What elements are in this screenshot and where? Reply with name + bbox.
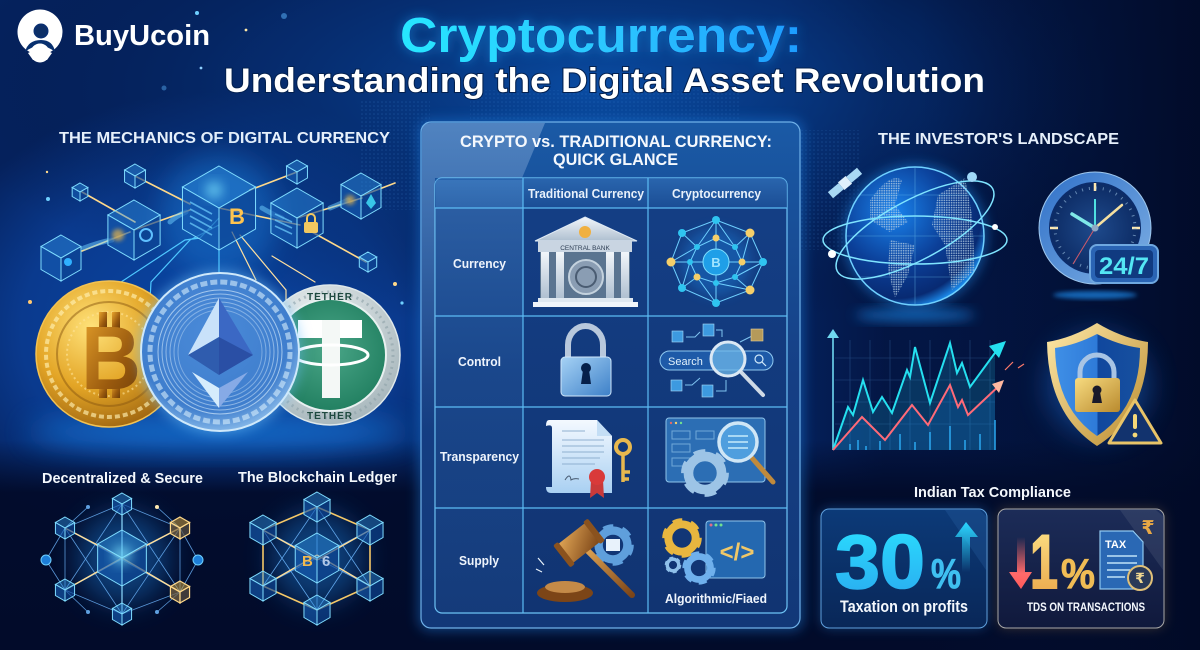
stat: 30 percent: 30 <box>835 520 925 605</box>
icon: tax document <box>1100 518 1155 590</box>
panel heading: QUICK GLANCE <box>553 150 678 169</box>
icon: logo mark <box>18 10 62 62</box>
icon: bitcoin coin <box>36 281 182 427</box>
icon: crypto network <box>666 216 767 307</box>
icon: central bank: CENTRAL BANK <box>560 245 610 252</box>
diagram: blockchain ledger <box>250 492 383 625</box>
chain of blocks illustration <box>41 155 395 300</box>
diagram: blockchain ledger: 6 <box>322 553 330 570</box>
icon: code window with magnifier <box>666 418 773 494</box>
stat: 1 percent <box>1030 520 1095 605</box>
cell text: algorithmic/fiaed: Algorithmic/Fiaed <box>665 591 767 606</box>
heading: indian tax compliance: Indian Tax Compliance <box>914 484 1071 501</box>
icon: search ledger: Search <box>668 356 703 368</box>
row label: supply: Supply <box>459 553 500 568</box>
title: Cryptocurrency: <box>400 9 802 63</box>
panel: crypto vs traditional currency <box>418 119 804 631</box>
icon: warning triangle <box>1109 400 1161 443</box>
heading: blockchain ledger: The Blockchain Ledger <box>238 469 397 486</box>
stat: 30 percent: % <box>931 550 961 597</box>
icon: shield with lock and warning <box>1046 323 1161 446</box>
arrow: up <box>955 522 978 572</box>
icon: gavel and gear <box>536 518 632 602</box>
icon: ethereum coin <box>138 270 302 434</box>
stat: 1 percent: % <box>1061 550 1095 597</box>
chart: volatile price lines <box>827 329 1024 450</box>
title: Cryptocurrency: <box>400 9 802 63</box>
logo wordmark: BuyUcoin <box>74 20 210 52</box>
panel heading <box>460 132 772 169</box>
stat: 1 percent: 1 <box>1030 520 1058 605</box>
icon: crypto network: B <box>711 255 721 270</box>
caption: taxation on profits: Taxation on profits <box>840 597 968 616</box>
card: 1% TDS <box>998 509 1164 628</box>
diagram: blockchain ledger: B <box>302 553 313 570</box>
row label: transparency: Transparency <box>440 449 520 464</box>
title <box>224 9 985 100</box>
icon: central bank <box>533 217 638 307</box>
icon: code and gears: </> <box>720 539 754 566</box>
column header: cryptocurrency: Cryptocurrency <box>672 186 762 201</box>
icon: tax document: ₹ <box>1135 570 1145 586</box>
heading: decentralized and secure: Decentralized & Secure <box>42 470 203 487</box>
panel heading: CRYPTO vs. TRADITIONAL CURRENCY: <box>460 132 772 151</box>
icon: tether coin: TETHER <box>307 292 353 303</box>
icon: document and key <box>546 420 630 498</box>
column header: traditional currency: Traditional Currency <box>528 186 645 201</box>
chain of blocks illustration: B <box>229 204 245 229</box>
heading: investor's landscape: THE INVESTOR'S LANDSCAPE <box>878 131 1119 148</box>
panel: investor's landscape <box>821 131 1164 628</box>
caption: tds on transactions: TDS ON TRANSACTIONS <box>1027 600 1145 614</box>
icon: tether coin: TETHER <box>307 411 353 422</box>
title: Understanding the Digital Asset Revolution <box>224 62 985 100</box>
stat: 30 percent <box>835 520 961 605</box>
icon: tax document: ₹ <box>1141 518 1155 539</box>
arrow: down <box>1009 537 1032 589</box>
icon: 24/7 clock <box>1039 172 1158 299</box>
icon: globe with orbits <box>823 162 1007 321</box>
row label: control: Control <box>458 354 501 369</box>
icon: search ledger <box>660 324 773 397</box>
heading: mechanics: THE MECHANICS OF DIGITAL CURRENCY <box>59 130 390 147</box>
icon: tax document: TAX <box>1105 539 1127 551</box>
logo: BuyUcoin <box>18 10 210 62</box>
row label: currency: Currency <box>453 256 507 271</box>
icon: bitcoin coin: B <box>81 309 141 409</box>
icon: padlock <box>561 326 611 396</box>
badge: 24/7: 24/7 <box>1099 253 1149 280</box>
icon: coin glow floor <box>28 416 408 448</box>
panel: mechanics of digital currency <box>28 130 408 625</box>
diagram: decentralized network <box>41 493 203 625</box>
icon: code and gears <box>665 521 765 583</box>
card: 30% taxation <box>821 509 987 628</box>
icon: tether coin <box>260 285 400 425</box>
comparison table <box>435 178 787 613</box>
